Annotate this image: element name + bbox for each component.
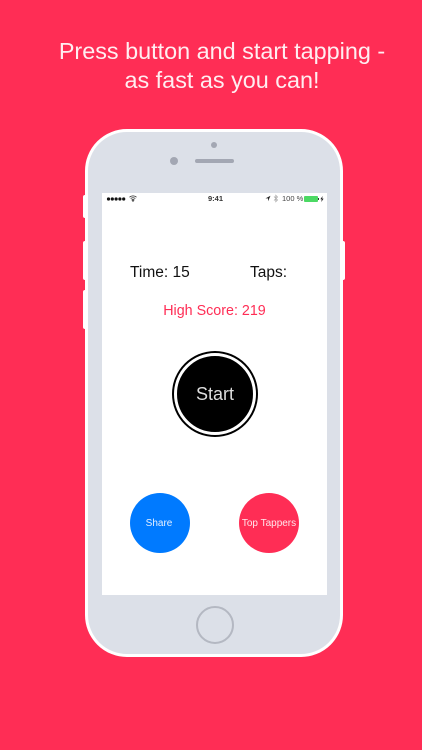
bluetooth icon	[274, 194, 278, 202]
title	[59, 38, 385, 93]
title: as fast as you can!	[124, 67, 320, 93]
charging bolt	[320, 196, 324, 202]
top tappers label: Top Tappers	[242, 518, 296, 529]
speaker	[195, 159, 234, 163]
high score: High Score: 219	[163, 303, 266, 319]
front camera	[170, 157, 178, 165]
share button	[130, 493, 190, 553]
side button: volume up	[83, 241, 87, 280]
battery	[304, 196, 318, 202]
wifi icon	[129, 196, 137, 202]
signal dots	[106, 197, 126, 201]
battery percent: 100 %	[282, 194, 303, 203]
clock: 9:41	[208, 194, 223, 203]
phone body	[85, 129, 343, 657]
taps label: Taps:	[250, 264, 287, 281]
white ring	[174, 353, 256, 435]
time label: Time: 15	[130, 264, 190, 281]
side button: volume down	[83, 290, 87, 329]
side button: mute	[83, 195, 87, 218]
title: Press button and start tapping -	[59, 38, 385, 64]
home button	[196, 606, 234, 644]
start button	[172, 351, 258, 437]
side button: power	[342, 241, 345, 280]
status bar	[106, 194, 324, 203]
share label: Share	[146, 518, 172, 529]
battery tip	[318, 198, 319, 200]
phone mockup	[83, 129, 345, 657]
top tappers button	[239, 493, 299, 553]
location arrow	[266, 196, 270, 202]
screen	[102, 193, 327, 595]
start label: Start	[196, 384, 234, 404]
front sensor	[211, 142, 217, 148]
